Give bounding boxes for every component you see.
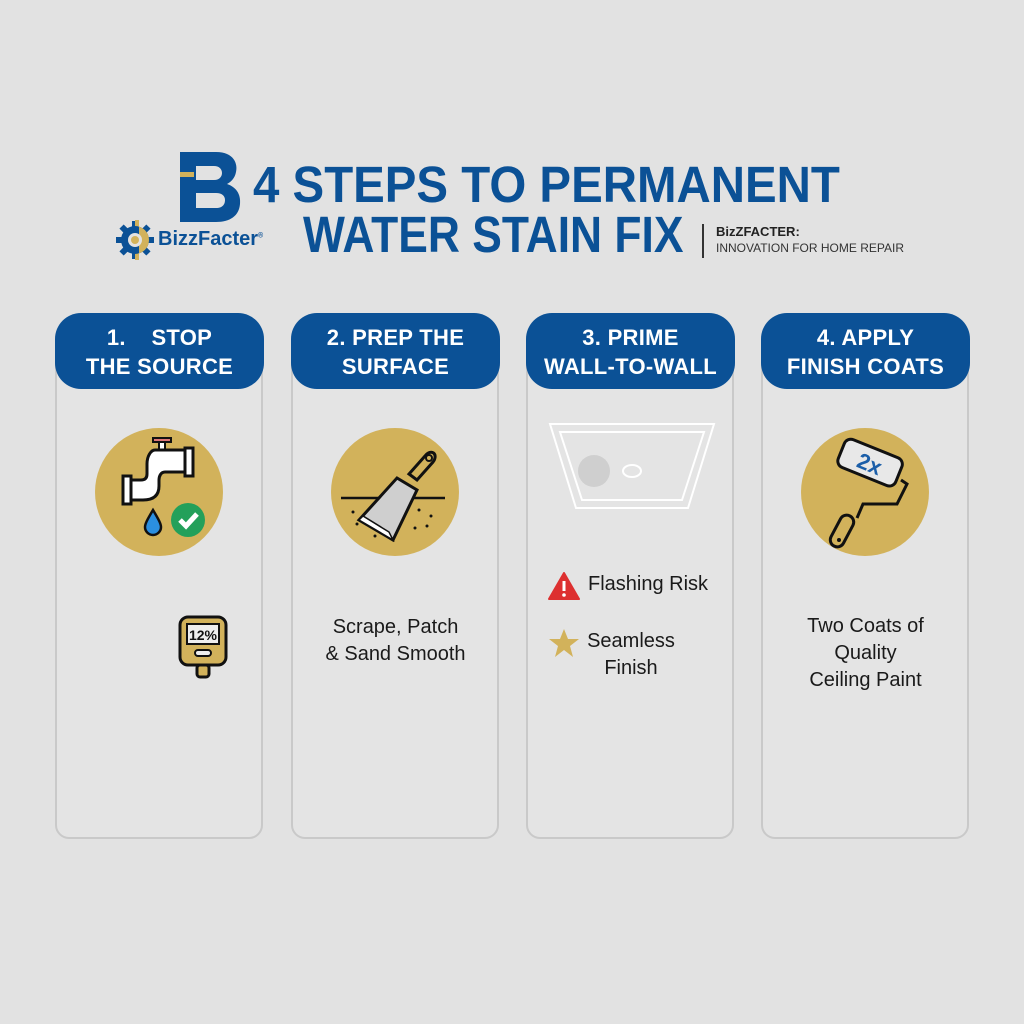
heading: step 4: 4. APPLY [817, 325, 914, 350]
text: step 4: Two Coats of [807, 615, 924, 637]
icon: moisture meter 12% [178, 616, 228, 678]
item: flashing risk [548, 572, 708, 600]
text: step 4: Ceiling Paint [809, 669, 922, 691]
heading: step 3 [526, 313, 735, 389]
heading: step 3: 3. PRIME [582, 325, 679, 350]
heading: step 1: 1. STOP [107, 325, 212, 350]
heading: step 3: WALL-TO-WALL [544, 354, 717, 379]
icon: ceiling [548, 423, 716, 509]
item: seamless finish: Finish [604, 657, 658, 679]
text: step 2: Scrape, Patch [333, 616, 458, 638]
tagline: BizZFACTER: [716, 224, 800, 239]
tagline [702, 224, 922, 258]
text: step 4 [807, 615, 924, 691]
panel: step 1 [55, 313, 264, 839]
heading: step 1 [55, 313, 264, 389]
logo: B mark [180, 152, 240, 222]
heading: step 4: FINISH COATS [787, 354, 944, 379]
title: 4 STEPS TO PERMANENT [253, 156, 840, 213]
item: seamless finish [549, 629, 675, 679]
logo: gear + BizzFacter [116, 220, 264, 260]
panel: step 2 [291, 313, 500, 839]
text: step 2: & Sand Smooth [325, 643, 466, 665]
heading: step 2 [291, 313, 500, 389]
icon: scraper [331, 428, 459, 556]
logo: gear + BizzFacter: BizzFacter® [158, 228, 263, 250]
title: WATER STAIN FIX [303, 206, 683, 263]
item: seamless finish: Seamless [587, 630, 675, 652]
icon: pipe with check [95, 428, 223, 556]
title [253, 156, 840, 263]
panel: step 4 [761, 313, 970, 839]
text: step 4: Quality [834, 642, 897, 664]
item: flashing risk: Flashing Risk [588, 573, 708, 595]
tagline: INNOVATION FOR HOME REPAIR [716, 241, 904, 255]
icon: paint roller 2x [801, 428, 929, 556]
heading: step 2: 2. PREP THE [327, 325, 464, 350]
heading: step 4 [761, 313, 970, 389]
panel: step 3 [526, 313, 735, 839]
icon: moisture meter 12%: 12% [189, 627, 218, 643]
text: step 2 [325, 616, 466, 665]
heading: step 1: THE SOURCE [86, 354, 233, 379]
heading: step 2: SURFACE [342, 354, 449, 379]
icon: paint roller 2x: 2x [853, 448, 886, 480]
